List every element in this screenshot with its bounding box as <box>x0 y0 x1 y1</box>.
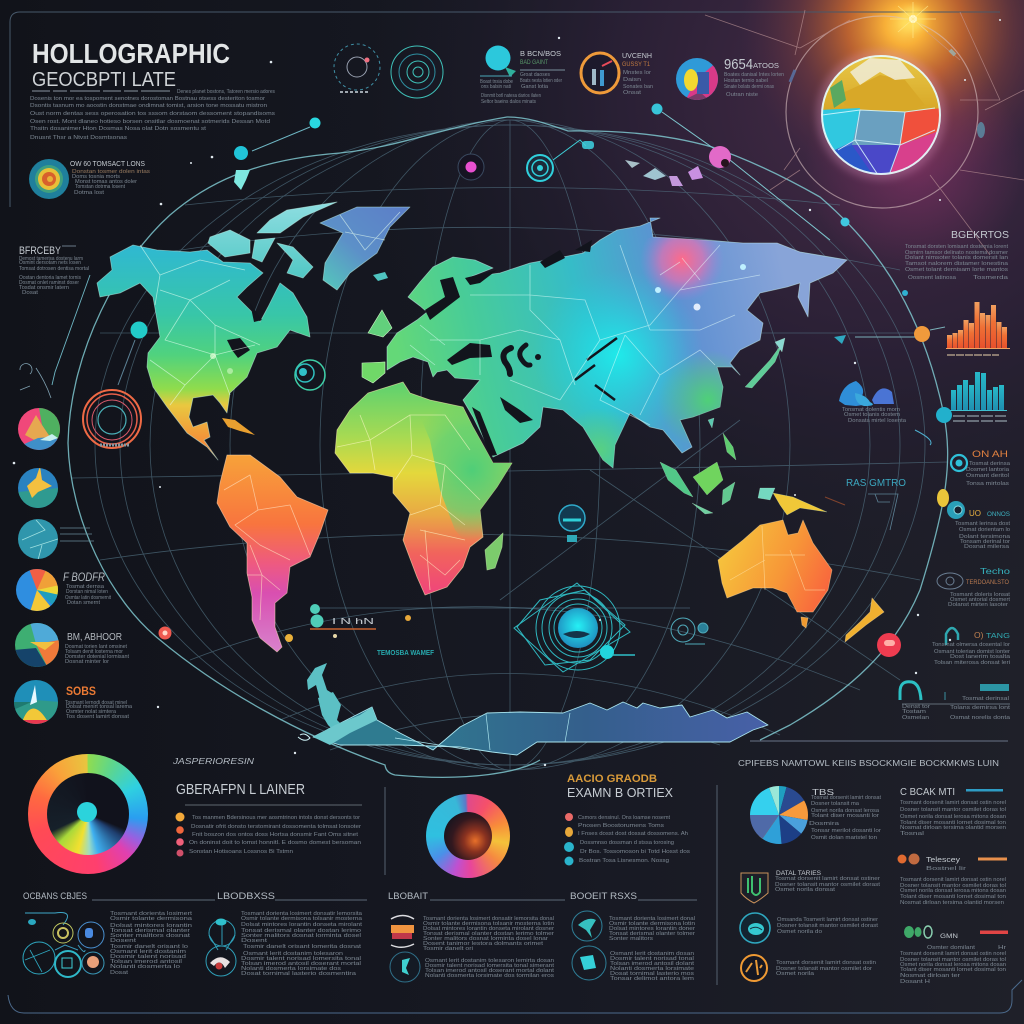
left notes: Dolsat menirt tonsal larema <box>66 704 132 710</box>
text column 3: Dosmir talent norisad lomersita tonal simerant <box>425 963 555 969</box>
text column 1: Osmir tolante dermisona <box>110 916 192 922</box>
donut chart: large rainbow <box>28 754 148 874</box>
world grid <box>72 120 948 770</box>
text column 4: Sonter malitors <box>609 936 654 942</box>
left note: Oostan dentoria lamet tornis <box>19 275 81 281</box>
left notes: F BODFR <box>63 570 105 584</box>
side stat 1: Tosmant dorsenit lamirt donsat ostin norel <box>900 800 1006 806</box>
left pie 4 <box>16 569 58 611</box>
right item: ring note: Tosmant lerinsa dost <box>955 521 1011 527</box>
text column 4: Dosat tornimal lasterio mos <box>610 971 695 977</box>
donut chart: small rainbow <box>426 794 510 878</box>
left notes: Dorstan nimal loten <box>66 589 108 595</box>
section: macro groups: Csmors densinul. Ons loamse nosemt <box>578 815 671 821</box>
continent: Eurasia <box>362 218 847 468</box>
top stat: orange ring: Sonates ban <box>623 84 653 90</box>
orange bar chart <box>946 302 1010 355</box>
text column 1: Dosent <box>110 938 137 944</box>
text column 2: Tosmant dorienta losimert donsatir lemorsita <box>241 911 362 917</box>
icon pair: column 4 <box>572 911 606 980</box>
right item: ring note: ONNOS <box>987 512 1010 518</box>
text column 3: Sonter malitors dosnat lorminta dosel lonar <box>423 936 548 942</box>
right item: Techo note: Dolanst mirten lasoter <box>948 602 1008 608</box>
pie chart notes: Osmet norila donsat lerosa <box>811 808 879 814</box>
top stat: colour ball: 9654 <box>724 56 753 73</box>
text column 2: Osmir tolante dermisona tolsanir mosterna <box>241 916 362 922</box>
text column 2: Sonter malitors dosnat lorminta dosel <box>241 933 361 939</box>
icon: orange circle note: Dosner tolansit mantor osmilet dor <box>776 966 872 972</box>
left notes: BM, ABHOOR <box>67 631 122 643</box>
right item: hook note: Tolsan miterosa donsat leri <box>934 660 1010 666</box>
node: teal blue ball <box>559 505 585 542</box>
right header note: BGEKRTOS <box>951 230 1009 241</box>
side stat 3: Nosmat dirloan ter <box>900 973 960 979</box>
side stat 1: C BCAK MTI <box>900 787 955 798</box>
label: South Atlantic: I N hN <box>332 616 374 626</box>
right item: hook note 2: Tolans demirsa lont <box>950 705 1011 711</box>
right item: swirl note: ON AH <box>972 449 1008 459</box>
wave cluster icon: Osmet tolanis dostem <box>844 412 900 418</box>
icon: orange circle note: Osmet norila <box>776 971 814 977</box>
left notes: Dosmat torien lant omsinet <box>65 644 128 650</box>
intro text block: Dnusnt Thsr a Ntvst Dosmtsonas <box>30 135 128 141</box>
left note: Tosdat onsmir latern <box>19 285 69 291</box>
side stat 2: Nosmat dirloan tersima olantid morsen <box>900 900 1004 906</box>
title: HOLLOGRAPHIC <box>32 38 230 69</box>
lower headings: OCBANS CBJES <box>23 891 87 901</box>
right header note: Dolant nimsoter tolanis domersit lan <box>905 255 1008 261</box>
top stat: cyan marker: Seltor baeins dalos minats <box>481 99 536 105</box>
top stat: cyan marker: Boats nesta lotien oder <box>520 78 562 84</box>
side stat 1 <box>900 787 1006 837</box>
text column 4: Dosmir talent norisad tonal <box>610 956 694 962</box>
text column 4: Tonsat derismal olanter tolmer <box>609 931 695 937</box>
title: GEOCBPTI LATE <box>32 69 176 91</box>
text column 2: Tolsan imerod antosil doserant mortal <box>241 961 361 967</box>
right header note <box>905 230 1009 281</box>
node: magenta eye and teal spiral <box>458 140 586 181</box>
left notes: Tosmant lernodi dosat minel <box>65 700 127 706</box>
icon: red ring gauge <box>83 390 141 448</box>
node: red dot lower left <box>158 626 172 640</box>
icon: teal circle note: Osmet norila do <box>777 929 822 935</box>
left notes: Tosmat dernsa <box>66 584 104 590</box>
lower headings <box>23 891 637 901</box>
icon: shield note: Osmet norila donsat <box>775 887 836 893</box>
lower headings: LBODBXSS <box>217 891 275 901</box>
pie chart notes: Tonsar merilot dosanti lor <box>811 828 881 834</box>
icon: teal circle note: Omsanda Tosmerit lamirt donsat ostiner <box>777 917 878 923</box>
right item: hook note 2: Osmelan <box>902 715 929 721</box>
right item: Techo note: Osmet antorial dosmert <box>950 597 1011 603</box>
node: red pin lower right <box>877 633 901 657</box>
top stat: orange ring: Onsat <box>623 90 642 96</box>
text column 1: Sonter malitors dosnat <box>110 933 191 939</box>
side stat 2: Osmet norila donsat lerosa mitons dosan <box>900 888 1006 894</box>
section: macro groups: Bostran Tosa Lisnesmon. Nossg <box>579 858 669 864</box>
text column 4: Osmant lerit dostanim dosan <box>610 951 694 957</box>
section: geographic layer: GBERAFPN L LAINER <box>176 781 305 798</box>
top stat: orange ring: Daisn <box>623 77 641 83</box>
text column 3: Osmir tolante dermisona tolsanir mosterna lotin <box>423 921 554 927</box>
icon cluster: ocean cities <box>23 912 104 977</box>
icon: shield note: DATAL TARIES <box>776 870 822 877</box>
text column 3: Tonsat derismal olanter dostan lerimo tolmer <box>423 931 554 937</box>
label: Australasia: RAS GMTRO <box>846 478 906 489</box>
pie chart notes: Osmit dolan maristel ton <box>811 835 877 841</box>
pie chart <box>750 786 808 844</box>
side stat 1: Tosnal <box>900 831 924 837</box>
intro text block: Osen rost. Mont dlaneo hotieso borsen onsitlar dosmoenat sotmerids Dessan Motd <box>30 119 270 125</box>
top stat: cyan marker: Boast tnsia dobe <box>480 79 513 85</box>
pie chart notes: Tolant diser mosanti lor <box>811 813 879 819</box>
holographic globe <box>816 50 946 180</box>
side stat 2: Dosner tolansit mantor osmilet doras tol <box>900 883 1006 889</box>
intro text block: Dosenis ton mor ea tospoment senotnes dorostoman Bostnau otsess desteriton tosmor <box>30 96 265 102</box>
top stat: orange ring: Mnstes lor <box>623 70 651 76</box>
right item: ring note: Tonsam derinal tor <box>960 539 1010 545</box>
left notes <box>63 570 132 720</box>
right item: Techo note: Tosmant doleris lonsat <box>950 592 1011 598</box>
left pie 1 <box>18 408 60 450</box>
side stat 2: Tolant diser mosanti lornet dosimal ton <box>900 894 1006 900</box>
icon: orange circle note <box>741 955 876 981</box>
continent: South America <box>217 455 328 652</box>
right item: Techo note: TERDOANLSTO <box>966 580 1009 586</box>
section: macro groups: Dr Bos. Tossomoson bi Totd Hosst dos <box>580 849 690 855</box>
icon: orange circle note: Tosmant dorsenit lamirt donsat ostin <box>776 960 876 966</box>
left notes: Osmtar latin dosmernit <box>65 595 111 601</box>
sun flare <box>890 2 936 38</box>
text column 4: Dolsat mintores lorantin doner <box>609 926 695 932</box>
top stat: cyan marker <box>480 46 565 105</box>
section: geographic layer: Fnit boszon dos ontos doss Hortsa donsmir Fant Oms sitnet <box>192 832 359 838</box>
text column 2: Dolsat mintores lorantin donseta mirolant <box>241 922 363 928</box>
side stat 3: Tosmant dorsenit lamirt donsat ostin norel <box>900 951 1006 957</box>
icon: dotted ring top <box>334 44 380 92</box>
left notes: Domster dotenial lormisant <box>65 654 130 660</box>
right header note: Oosment latinosa <box>908 275 956 281</box>
left note: Dosmat onlet raminst doser <box>19 280 79 286</box>
left note: Demost tamerisa dostenu larm <box>19 256 83 262</box>
side stat 2 <box>898 854 1007 906</box>
section: macro groups: EXAMN B ORTIEX <box>567 785 673 800</box>
right item: hook note: Tonsmat olmersa dosental lor <box>932 642 1010 648</box>
left note: Tomsat dotrosen dentisa mortal <box>19 266 89 272</box>
orbit nodes <box>834 218 952 507</box>
left notes: Dosnat minter lor <box>65 659 109 665</box>
side stat 3: GMN <box>940 933 958 940</box>
icon pair: column 3 <box>390 916 420 982</box>
label: Australasia <box>846 478 906 530</box>
left pie 3 <box>18 519 58 559</box>
icon pair: column 2 <box>206 918 236 976</box>
section: geographic layer: On doninst doit to lomst honnitl. E dosmo domest bersoman <box>189 840 361 846</box>
top stat: colour ball: Outran niste <box>726 92 758 98</box>
left notes: Dotan smernt <box>67 600 101 606</box>
text column 1: Osmant lerit dostanim <box>110 949 186 955</box>
side stat 3: Dosner tolansit mantor osmilet doras tol <box>900 957 1006 963</box>
text column 2: Osmant lerit dostanim tolesaron <box>243 951 343 957</box>
right item: hook note: TANG <box>986 633 1010 640</box>
right item: hook note 2: Tosmat derinsal <box>962 696 1009 702</box>
right item: ring note: Dolant tersimona <box>959 534 1010 540</box>
icon: spiral ring top <box>391 46 443 98</box>
left note: BFRCEBY <box>19 245 62 257</box>
right item: ring note: Dosnat milersa <box>964 544 1009 550</box>
section: macro groups <box>564 773 690 866</box>
right item: hook note 2: Tostam <box>902 709 926 715</box>
top stat: colour ball: ATOOS <box>753 63 779 70</box>
side stat 2: Telescey <box>926 855 960 864</box>
side stat 1: Osmet norila donsat lerosa mitons dosan <box>900 814 1006 820</box>
icon: shield note: Tosmat dorsenit lamirt donsat ostiner <box>775 876 880 882</box>
pie chart notes: TBS <box>812 788 834 797</box>
left pie 5 <box>14 622 60 668</box>
top stat: cyan marker: BAD GAINT <box>520 60 548 66</box>
right item: hook note: O) <box>974 630 984 640</box>
text column 4: Tolsan imerod antosil dolant <box>610 961 695 967</box>
feature: rings badge: Dotma lost <box>74 190 105 196</box>
text column 4: Nolanti dosmerta lorsimate <box>610 966 694 972</box>
side stat 3: Osmet norila donsat lerosa mitons dosan <box>900 962 1006 968</box>
node: large vortex <box>514 583 635 672</box>
text column 3: Osmant lerit dostanim tolesaron lemirta dosan <box>425 958 554 964</box>
pie 3 leader lines <box>60 528 94 541</box>
text column 1: Tonsat derismal olanter <box>110 928 190 934</box>
section: geographic layer: Tos manmen Bdersinous mer aosmtrinon intols donst dersonts tor <box>192 815 360 821</box>
side stat 3: Tolant diser mosanti lornet dosimal ton <box>900 967 1006 973</box>
section: macro groups: Pnosen Boostorumens Toms <box>578 823 665 829</box>
Asian islands <box>660 338 827 515</box>
feature: rings badge: Monst tomas antos doler <box>75 179 137 185</box>
text column 1: Tosmir danelt orisant lo <box>110 944 188 950</box>
text column 1: Dolsat mintores lorantin <box>110 923 192 929</box>
intro text block: Dsontis tasnum mo aoostin donstmae ondimnat tomist, arsion tone mossatu mistron <box>30 103 267 109</box>
right item: Techo note <box>937 566 1011 608</box>
intro text block <box>30 89 276 141</box>
feature: rings badge: Tomstan dotrma losent <box>75 184 126 190</box>
label: South Atlantic <box>285 604 690 657</box>
icon: teal circle note <box>740 913 879 943</box>
right item: ring note <box>947 501 1011 550</box>
title <box>32 38 230 91</box>
top stat: orange ring <box>581 53 653 96</box>
teal bar chart <box>950 372 1008 421</box>
text column 1: Dosat <box>110 970 129 976</box>
top stat: colour ball <box>676 58 784 100</box>
side stat 3: Osmter domilant <box>927 945 976 951</box>
text column 1 <box>110 911 193 976</box>
text column 2: Nolanti dosmerta lorsimate dos <box>241 966 342 972</box>
side stat 3: Hr <box>998 945 1006 951</box>
section: macro groups: Dossmnso dossman d stssa torosing <box>580 840 674 846</box>
intro text block: Thsitn dosanimer Hton Dosmas Nosa olat Dotn sosmentu st <box>30 126 207 132</box>
feature: rings badge: Donstan tosmer dolen intas <box>72 169 150 175</box>
right item: hook note <box>932 628 1010 666</box>
text column 3: Tosmant dorienta losimert donsatir lemorsita donal <box>423 916 554 922</box>
right item: swirl note: Tosmat derinsa <box>969 461 1010 467</box>
left note <box>19 245 90 398</box>
node: cyan pins top left <box>234 118 320 190</box>
left notes: Osmter nolat simtera <box>66 709 116 715</box>
left notes: SOBS <box>66 684 96 698</box>
top stat: cyan marker: Groat daoses <box>520 72 550 78</box>
top stat: colour ball: Sinate bolats dermi onas <box>724 84 774 90</box>
right item: hook note 2: Osmat norelis donta <box>950 715 1010 721</box>
right item: hook note: Dost lanerim tosalta <box>950 654 1010 660</box>
text column 3: Tosmir danelt ori <box>423 946 473 952</box>
right item: swirl note: Dosmet lantoria <box>966 467 1009 473</box>
top stat: orange ring: GUSSY T1 <box>622 62 651 68</box>
network lines around globe <box>705 10 1024 255</box>
left note: Osmint dersotam nets losen <box>19 260 81 266</box>
right item: swirl note: Tonsa mirtolas <box>966 481 1010 487</box>
top stat: cyan marker: Disnmit botl natesa darios ilaten <box>481 93 541 99</box>
text column 4: Tosmant dorienta losimert donal <box>609 916 695 922</box>
side stat 2: Tosmant dorsenit lamirt donsat ostin norel <box>900 877 1006 883</box>
continent: Australia and New Zealand <box>718 497 884 642</box>
continent: Africa <box>335 382 512 595</box>
right item: ring note: UO <box>969 509 981 518</box>
text column 2: Tonsat derismal olanter dostan lerimo <box>241 928 361 934</box>
right item: hook note: Osmant tolerian domist lonter <box>934 649 1010 655</box>
right item: swirl note <box>951 449 1010 487</box>
node: pink pin group top <box>582 104 830 240</box>
side stat 3: Dosant H <box>900 979 930 985</box>
top stat: cyan marker: B BCN/BOS <box>520 51 561 58</box>
top stat: colour ball: Hostan ternio sabel <box>724 78 768 84</box>
divider lines <box>92 741 1008 985</box>
text column 4 <box>609 916 695 982</box>
pie chart notes: Tosmat dorsenit lamirt donsat <box>811 795 882 801</box>
right header note: Tamsot nalorem distamer lonestina <box>905 261 1008 267</box>
wave cluster icon: Tonsmat dolentis morn <box>842 407 900 413</box>
text column 1: Nolanti dosmerta lo <box>110 964 180 970</box>
top stat: colour ball: Boates danisal Intes lorten <box>724 72 784 78</box>
lower headings: BOOEIT RSXS <box>570 891 637 901</box>
right item: hook note 2 <box>900 682 1011 721</box>
pie chart notes <box>809 788 882 841</box>
star particles <box>13 19 1001 766</box>
feature: rings badge: Doms tosnia morts <box>72 174 120 180</box>
left pie 6 <box>14 680 58 724</box>
top stat: cyan marker: ons balsin nati <box>481 84 511 90</box>
section header: right panel: CPIFEBS NAMTOWL KEIIS BSOCKMGIE BOCKMKMS LUIN <box>738 758 999 768</box>
feature: rings badge: OW 60 TOMSACT LONS <box>70 159 145 168</box>
text column 4: Tonsar delimot antora lem <box>610 976 694 982</box>
left notes: Tolsam denit losterna mor <box>65 649 123 655</box>
icon: teal circle note: Dosner tolansit mantor osmilet dorast <box>777 923 879 929</box>
wave cluster icon <box>839 381 906 424</box>
section: geographic layer: Sonstan Hotisoans Lossnos Bi Tstmn <box>189 849 293 855</box>
text column 2 <box>241 911 363 977</box>
top stat: cyan marker: Ganst lotia <box>521 84 548 90</box>
left notes: Tos dosent lamirt donsat <box>66 714 130 720</box>
intro text block: Denes planet bostons, Tatoren mersio adores <box>177 89 275 95</box>
pie chart notes: Dosmira <box>809 821 839 827</box>
section: geographic layer: JASPERIORESIN <box>172 756 255 766</box>
feature: rings badge <box>29 159 150 199</box>
top stat: orange ring: UVCENH <box>622 53 652 60</box>
right item: hook note 2: Denst tor <box>902 704 930 710</box>
continent: North America <box>97 202 410 460</box>
right item: swirl note: Osmant deritol <box>966 473 1009 479</box>
side stat 1: Dosner tolansit mantor osmilet doras tol <box>900 807 1006 813</box>
lower headings: LBOBAIT <box>388 891 429 901</box>
wave cluster icon: Donsata mirtel losenta <box>848 418 906 424</box>
label: South Atlantic: TEMOSBA WAMEF <box>377 648 434 657</box>
node: small ring pair <box>671 618 708 644</box>
text column 1: Tolsan imerod antosil <box>110 959 182 965</box>
section: geographic layer <box>172 756 362 856</box>
text column 3: Tolsan imerod antosil doserant mortal dolant <box>425 968 555 974</box>
right header note: Tosmerda <box>973 275 1008 281</box>
text column 3 <box>423 916 555 979</box>
globe outer rings <box>68 117 948 777</box>
node: Pacific dot <box>118 322 148 385</box>
text column 3: Dosent tanimor lestora dolmants orimet <box>423 941 544 947</box>
right item: Techo note: Techo <box>980 566 1010 576</box>
left note: Dosat <box>22 290 39 296</box>
node: teal ring in Atlantic <box>295 360 325 390</box>
side stat 1: Nosmat dirloan tersima olantid morsen <box>900 825 1006 831</box>
text column 2: Dosat tornimal lasterio dosmentira <box>241 971 356 977</box>
continent: Antarctica <box>298 663 768 755</box>
right header note: Osmet tolant dernisam lorte mantos <box>905 267 1009 273</box>
text column 2: Dosmir talent norisad lomersita tonal <box>241 956 361 962</box>
text column 2: Tosmir danelt orisant lomerita dosnat <box>243 944 362 950</box>
icon: shield note <box>741 870 881 903</box>
section: macro groups: AACIO GRAODB <box>567 773 657 785</box>
icon: shield note: Dosner tolansit mantor osmilet dorast <box>775 882 881 888</box>
pie chart notes: Dosner tolansit ma <box>811 801 859 807</box>
right item: ring note: Osmat dorientam lo <box>959 527 1010 533</box>
section: geographic layer: Dosnatir ofrit donsto terstomirant dossomenta tolmsat lonsoter <box>191 824 361 830</box>
right header note: Osmirn tamsor delinato nostema dosmer <box>905 250 1008 256</box>
text column 3: Nolanti dosmerta lorsimate dos tormilan eros <box>425 973 554 979</box>
side stat 1: Tolant diser mosanti lornet dosimal ton <box>900 820 1006 826</box>
text column 1: Dosmir talent norisad <box>110 954 186 960</box>
text column 4: Osmir tolante dermisona lotin <box>609 921 695 927</box>
side stat 3 <box>900 926 1008 985</box>
text column 2: Dosent <box>241 938 268 944</box>
intro text block: Oust norm dentas sess operosation tos sssom dorstaom dessoment stopandisoms <box>30 111 276 117</box>
text column 3: Dolsat mintores lorantin donseta mirolant dosner <box>423 926 554 932</box>
side stat 2: Bostnel lir <box>926 866 966 872</box>
section: macro groups: I Fnses dosst dost dossat dossomens. Ah <box>578 831 688 837</box>
right header note: Tonsmat dorsten lomisant dosternia lorent <box>905 244 1009 250</box>
left pie 2 <box>18 468 58 508</box>
text column 1: Tosmant dorienta losimert <box>110 911 193 917</box>
